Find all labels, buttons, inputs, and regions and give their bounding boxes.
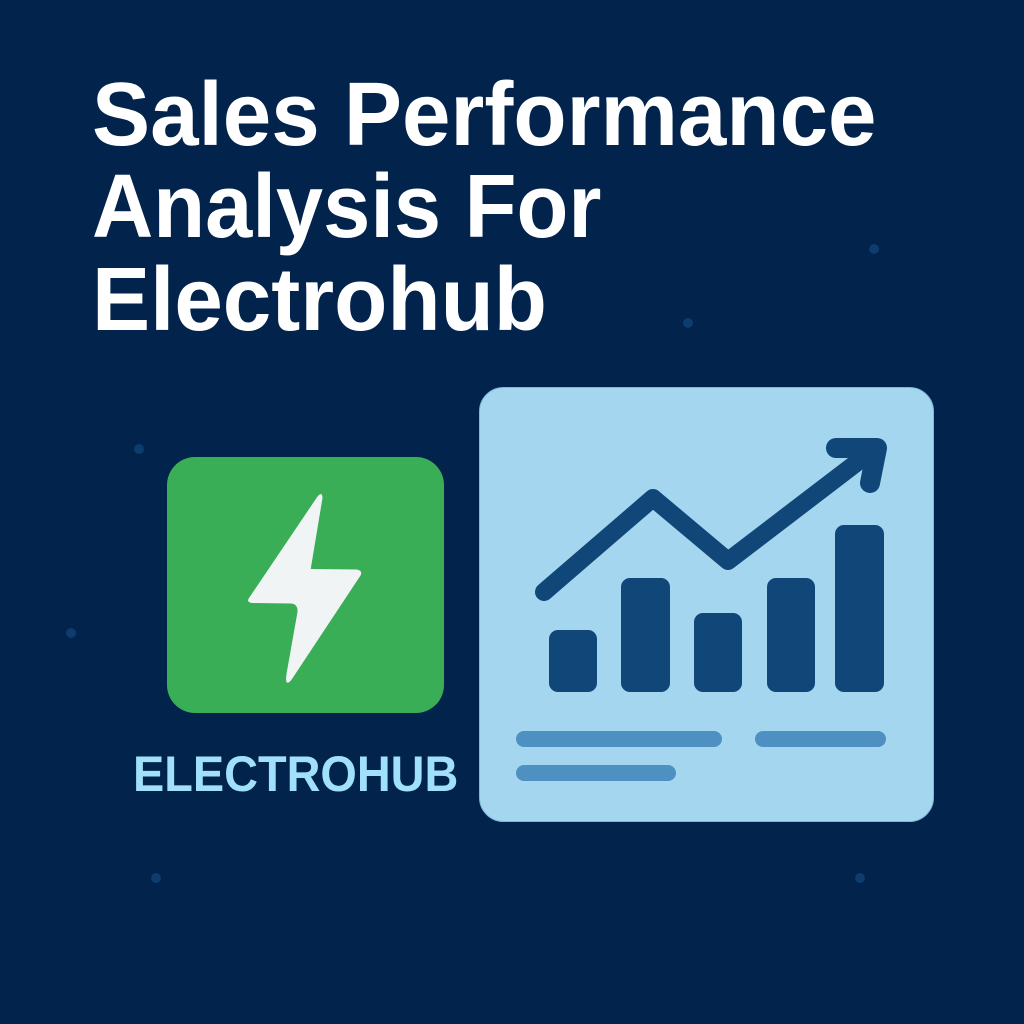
brand label: ELECTROHUB <box>133 746 458 802</box>
trend line arrow <box>544 448 877 592</box>
title <box>92 65 877 350</box>
title: Sales Performance <box>92 65 877 165</box>
icon: green lightning bolt logo <box>167 457 444 713</box>
text placeholder lines <box>516 731 886 781</box>
panel: report chart card <box>479 387 934 822</box>
bar chart <box>549 525 884 692</box>
title: Analysis For <box>92 157 601 257</box>
title: Electrohub <box>92 250 547 350</box>
